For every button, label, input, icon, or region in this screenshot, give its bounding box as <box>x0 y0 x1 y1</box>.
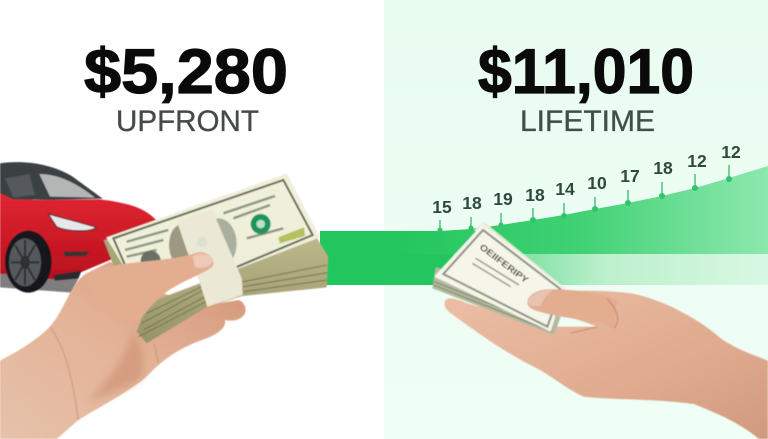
chart: lifetime cost band <box>320 142 768 285</box>
banknote seal <box>251 214 271 234</box>
chart value labels: 18 <box>653 158 673 178</box>
banknote portrait <box>200 218 237 268</box>
front banknote <box>434 224 564 332</box>
illustration: right hand holding cash <box>432 222 768 439</box>
car roof and windows <box>0 162 103 200</box>
cash stack edges <box>137 237 328 343</box>
chart value labels: 10 <box>587 173 607 193</box>
right thumbnail <box>528 290 553 306</box>
chart value labels: 19 <box>493 189 513 209</box>
label: upfront: UPFRONT <box>116 105 259 138</box>
left hand palm and arm <box>0 262 246 439</box>
car shadow <box>0 273 80 293</box>
right hand and arm lower part <box>444 291 768 439</box>
heading: upfront amount: $5,280 <box>84 37 288 107</box>
panel: upfront background <box>0 0 384 439</box>
chart value labels: 18 <box>525 185 545 205</box>
chart value labels: 14 <box>555 179 575 199</box>
cash stack edge <box>432 267 561 335</box>
band: solid lower left <box>384 254 454 285</box>
left thumbnail <box>193 254 213 268</box>
heading: lifetime amount: $11,010 <box>478 37 694 107</box>
chart value labels: 18 <box>462 193 482 213</box>
cash left side edge <box>103 237 130 278</box>
left thumb <box>85 252 214 320</box>
palm shading <box>87 330 143 403</box>
banknote text: OEIIFERIPY <box>478 242 530 285</box>
chart value labels <box>432 142 741 217</box>
illustration: red car <box>0 162 157 293</box>
car lower vent <box>63 252 89 257</box>
band: pale lower section <box>384 254 768 285</box>
top banknote <box>106 173 320 274</box>
label: lifetime: LIFETIME <box>520 105 655 138</box>
chart value labels: 17 <box>620 166 640 186</box>
chart value labels: 12 <box>687 151 707 171</box>
right finger creases <box>571 298 618 333</box>
right thumb <box>527 289 617 328</box>
chart markers <box>438 165 732 232</box>
panel: lifetime background <box>384 0 768 439</box>
band: rising upper area <box>384 166 768 254</box>
left finger creases <box>50 327 158 420</box>
car wheel <box>5 231 52 293</box>
banknote behind <box>474 222 566 297</box>
chart value labels: 12 <box>721 142 741 162</box>
band: flat section from upfront side <box>320 231 386 285</box>
paper money band <box>177 209 243 307</box>
car headlight <box>48 214 96 231</box>
chart value labels: 15 <box>432 197 452 217</box>
banknote value <box>278 227 305 243</box>
illustration: left hand holding cash stack <box>0 173 328 439</box>
car body <box>0 182 157 279</box>
